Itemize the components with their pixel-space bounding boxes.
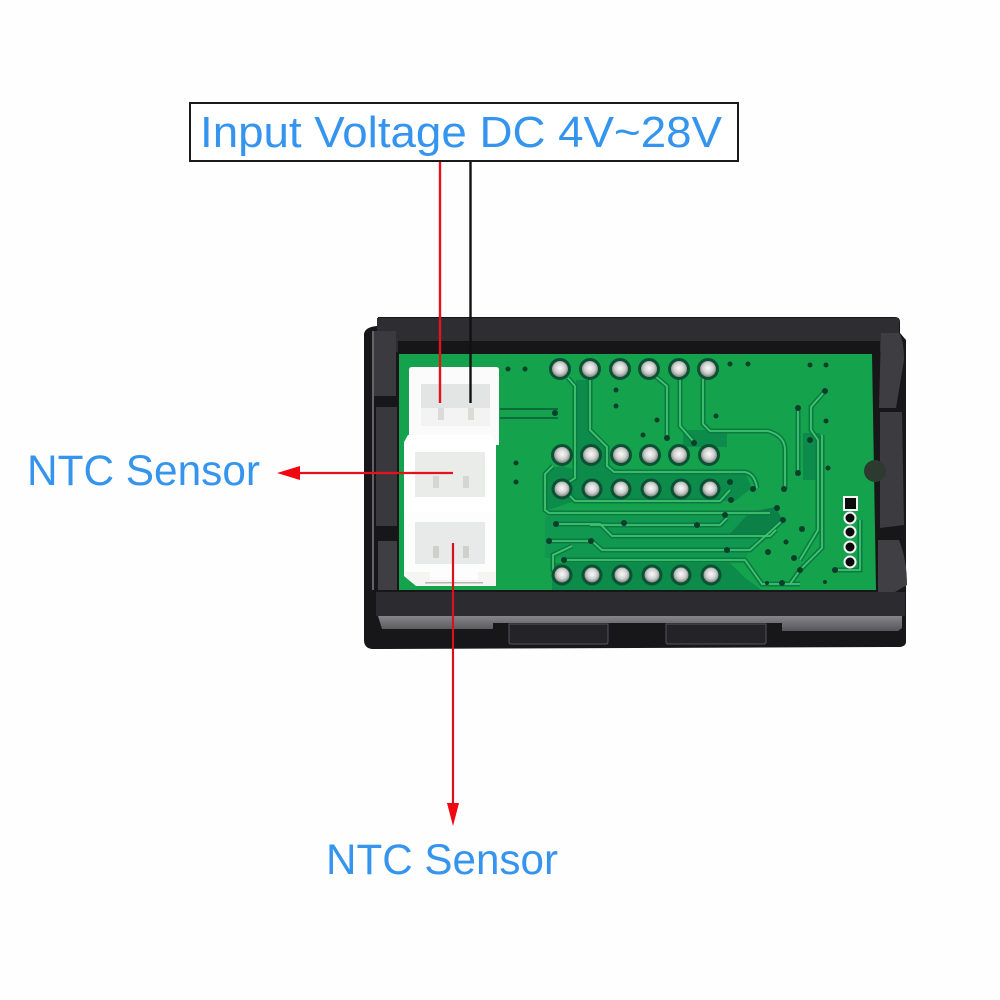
black negative wire xyxy=(469,162,472,403)
device: panel meter back view xyxy=(364,317,907,649)
housing top bar xyxy=(377,318,899,352)
arrow: to bottom NTC sensor xyxy=(447,543,459,826)
label: left NTC sensor: NTC Sensor xyxy=(27,447,260,495)
label box: input voltage: Input Voltage DC 4V~28V xyxy=(200,108,723,157)
green PCB xyxy=(399,354,886,590)
circuit traces xyxy=(545,376,860,584)
small vias xyxy=(506,362,838,586)
red positive wire xyxy=(439,162,441,403)
bottom connector xyxy=(404,512,496,586)
bottom tabs xyxy=(509,624,766,644)
black housing xyxy=(364,317,906,649)
darker copper-free zones xyxy=(545,380,820,590)
housing bottom bar xyxy=(376,592,905,616)
label: bottom NTC sensor: NTC Sensor xyxy=(326,836,558,884)
mounting notch xyxy=(864,460,886,482)
solder pads xyxy=(550,360,720,584)
right clip xyxy=(878,333,907,592)
five-pin header holes xyxy=(844,497,857,568)
white connectors xyxy=(404,367,499,586)
top connector xyxy=(409,367,499,445)
arrow: to left NTC sensor xyxy=(277,466,453,480)
bottom grey strip xyxy=(378,616,902,631)
left clip xyxy=(373,331,397,590)
middle connector xyxy=(404,435,496,515)
